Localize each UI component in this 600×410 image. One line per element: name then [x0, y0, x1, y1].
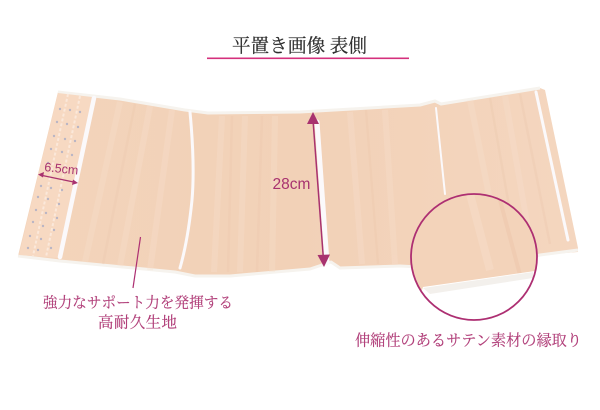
label: fabric: 強力なサポート力を発揮する [43, 294, 233, 312]
label: satin binding: 伸縮性のあるサテン素材の縁取り [355, 332, 582, 350]
measure: 28cm height arrow: 28cm [272, 176, 310, 193]
white elastic strips and seams [60, 92, 568, 268]
label: fabric [43, 294, 233, 332]
measure: 28cm height arrow [272, 112, 330, 267]
hook panel [19, 93, 92, 258]
title: 平置き画像 表側 [232, 35, 367, 57]
pleats [85, 96, 530, 272]
detail magnifier circle [410, 193, 540, 325]
label: fabric: 高耐久生地 [98, 312, 177, 332]
measure: 6.5cm width arrow: 6.5cm [44, 160, 79, 178]
leader line to fabric label [133, 237, 140, 288]
title underline [207, 58, 409, 59]
corset body [18, 88, 578, 276]
corset product photo [18, 88, 578, 276]
top and bottom satin binding [18, 88, 578, 276]
measure: 6.5cm width arrow [38, 160, 79, 185]
